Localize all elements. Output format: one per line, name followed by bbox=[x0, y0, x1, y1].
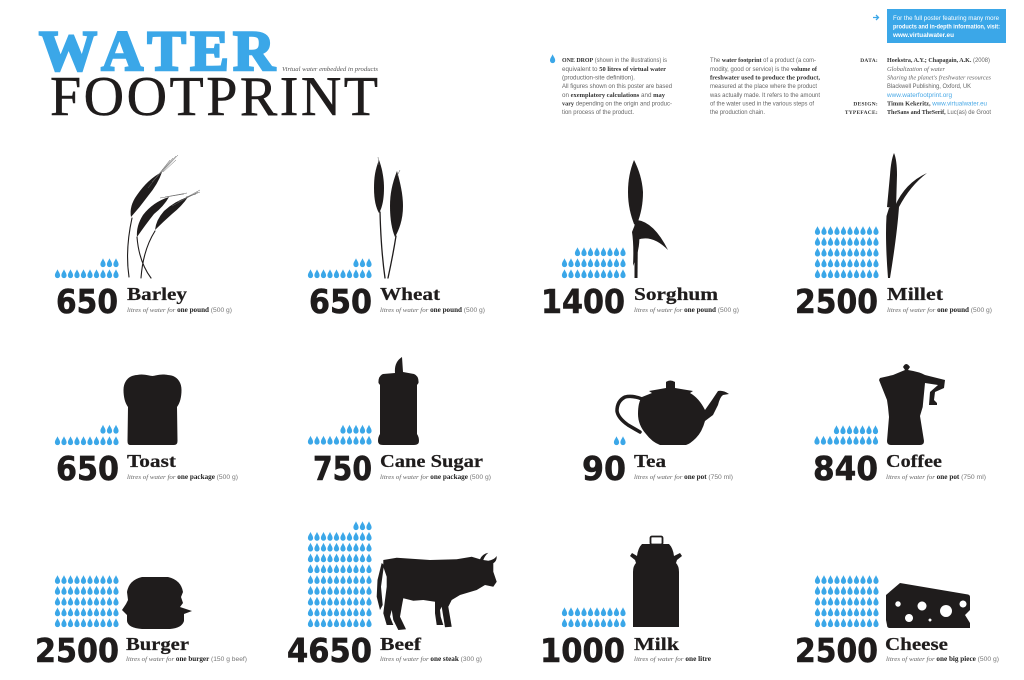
unit text: litres of water for one package (500 g) bbox=[127, 474, 238, 481]
unit text: litres of water for one pot (750 ml) bbox=[634, 474, 733, 481]
water drops bbox=[55, 575, 119, 627]
panel: cane sugar bbox=[308, 357, 491, 488]
icon: teapot bbox=[614, 380, 729, 445]
callout text: www.virtualwater.eu bbox=[892, 32, 954, 39]
number: 750 bbox=[313, 449, 372, 488]
title word: water: WATER bbox=[39, 20, 279, 83]
icon: barley bbox=[55, 155, 200, 278]
text block: one drop explanation: (production-site definition). bbox=[562, 74, 635, 82]
text block: credits: www.waterfootprint.org bbox=[886, 92, 953, 99]
callout: full poster link bbox=[873, 9, 1006, 43]
text block: water footprint definition: modity, good or service) is the volume of bbox=[710, 66, 818, 73]
unit text: litres of water for one pound (500 g) bbox=[887, 307, 992, 314]
panel: beef bbox=[287, 521, 497, 670]
number: 90 bbox=[582, 449, 626, 488]
text block: water footprint definition: was actually made. It refers to the amount bbox=[709, 92, 820, 99]
unit text: litres of water for one pound (500 g) bbox=[634, 307, 739, 314]
water drops bbox=[562, 607, 626, 627]
text block: credits: TYPEFACE: bbox=[845, 110, 878, 116]
text block: credits: Timm Kekeritz, www.virtualwater.eu bbox=[887, 100, 988, 108]
product name: Milk bbox=[634, 634, 679, 654]
panel: sorghum bbox=[541, 160, 739, 321]
unit text: litres of water for one big piece (500 g) bbox=[886, 656, 999, 663]
text block: credits: DESIGN: bbox=[853, 102, 878, 108]
icon: millet bbox=[815, 153, 927, 278]
icon: toast bbox=[55, 375, 182, 445]
number: 650 bbox=[309, 282, 372, 321]
water drops bbox=[614, 436, 626, 445]
callout box bbox=[887, 9, 1006, 43]
number: 650 bbox=[56, 449, 119, 488]
water drops bbox=[308, 258, 372, 278]
text block: credits: DATA: bbox=[860, 58, 878, 64]
number: 840 bbox=[813, 449, 878, 488]
text block: credits: Blackwell Publishing, Oxford, UK bbox=[887, 83, 972, 90]
icon: wheat bbox=[308, 157, 403, 278]
text block: credits: Hoekstra, A.Y.; Chapagain, A.K. (2008) bbox=[887, 57, 990, 64]
product name: Cheese bbox=[885, 634, 948, 654]
product name: Wheat bbox=[380, 284, 440, 304]
icon: cow bbox=[308, 521, 497, 630]
water drops bbox=[814, 425, 878, 445]
callout text: For the full poster featuring many more bbox=[893, 15, 1000, 22]
subtitle: Virtual water embedded in products bbox=[282, 66, 378, 73]
text block: one drop explanation: vary depending on the origin and produc- bbox=[562, 100, 672, 108]
text block: water footprint definition bbox=[709, 57, 820, 116]
icon: milk can bbox=[562, 536, 682, 627]
title bbox=[39, 20, 378, 128]
text block: credits bbox=[845, 57, 991, 116]
product name: Beef bbox=[380, 634, 421, 654]
unit text: litres of water for one pot (750 ml) bbox=[886, 474, 986, 481]
text block: one drop explanation: tion process of the product. bbox=[562, 109, 634, 116]
panel: tea bbox=[582, 380, 733, 488]
text block: water footprint definition: The water footprint of a product (a com- bbox=[710, 57, 816, 64]
number: 1400 bbox=[541, 282, 625, 321]
text block: one drop explanation: ONE DROP (shown in the illustrations) is bbox=[562, 57, 667, 64]
title word: footprint: FOOTPRINT bbox=[50, 66, 378, 128]
water drops bbox=[815, 226, 879, 278]
number: 2500 bbox=[35, 631, 119, 670]
panel: barley bbox=[55, 155, 232, 321]
callout text: products and in-depth information, visit: bbox=[893, 24, 1000, 30]
water drops bbox=[55, 258, 119, 278]
icon: cheese bbox=[815, 575, 970, 628]
panel: wheat bbox=[308, 157, 485, 321]
icon: sugar dispenser bbox=[308, 357, 419, 445]
number: 2500 bbox=[795, 282, 878, 321]
text block: credits: TheSans and TheSerif, Luc(as) de Groot bbox=[887, 109, 991, 116]
product name: Sorghum bbox=[634, 284, 719, 304]
text block: water footprint definition: of the water used in the various steps of bbox=[710, 100, 814, 108]
number: 650 bbox=[56, 282, 118, 321]
number: 1000 bbox=[540, 631, 625, 670]
text block: credits: Sharing the planet's freshwater resources bbox=[887, 74, 991, 82]
text block: water footprint definition: the production chain. bbox=[710, 109, 765, 116]
product name: Barley bbox=[127, 284, 187, 304]
product name: Tea bbox=[634, 451, 666, 471]
panel: cheese bbox=[795, 575, 999, 670]
icon: arrow bbox=[873, 15, 878, 20]
text block: water footprint definition: freshwater used to produce the product, bbox=[710, 74, 820, 82]
number: 4650 bbox=[287, 631, 372, 670]
panel: toast bbox=[55, 375, 238, 488]
water drops bbox=[562, 247, 626, 278]
unit text: litres of water for one pound (500 g) bbox=[127, 307, 232, 314]
unit text: litres of water for one litre bbox=[634, 656, 711, 663]
product name: Millet bbox=[887, 284, 943, 304]
panel: millet bbox=[795, 153, 992, 321]
unit text: litres of water for one burger (150 g beef) bbox=[126, 656, 247, 663]
panel: burger bbox=[35, 575, 247, 670]
water drops bbox=[308, 425, 372, 445]
water drops bbox=[55, 425, 119, 445]
text block: one drop explanation: on exemplatory calculations and may bbox=[562, 92, 666, 99]
panel: coffee bbox=[813, 364, 986, 488]
icon: burger bbox=[55, 575, 192, 629]
text block: one drop explanation: All figures shown on this poster are based bbox=[562, 83, 673, 90]
product name: Burger bbox=[126, 634, 189, 654]
number: 2500 bbox=[795, 631, 878, 670]
product name: Toast bbox=[127, 451, 176, 471]
text block: credits: Globalization of water bbox=[887, 66, 946, 73]
callout text bbox=[892, 15, 1000, 39]
icon: blue drop bbox=[550, 54, 555, 63]
panel: milk bbox=[540, 536, 711, 670]
water drops bbox=[308, 521, 372, 627]
product name: Cane Sugar bbox=[380, 451, 483, 471]
text block: one drop explanation bbox=[550, 54, 673, 116]
text block: water footprint definition: measured at the place where the product bbox=[710, 83, 817, 90]
icon: moka pot bbox=[814, 364, 945, 445]
text block: one drop explanation: equivalent to 50 litres of virtual water bbox=[562, 66, 666, 73]
unit text: litres of water for one steak (300 g) bbox=[380, 656, 482, 663]
water drops bbox=[815, 575, 879, 627]
icon: sorghum bbox=[562, 160, 668, 278]
unit text: litres of water for one pound (500 g) bbox=[380, 307, 485, 314]
product name: Coffee bbox=[886, 451, 942, 471]
unit text: litres of water for one package (500 g) bbox=[380, 474, 491, 481]
